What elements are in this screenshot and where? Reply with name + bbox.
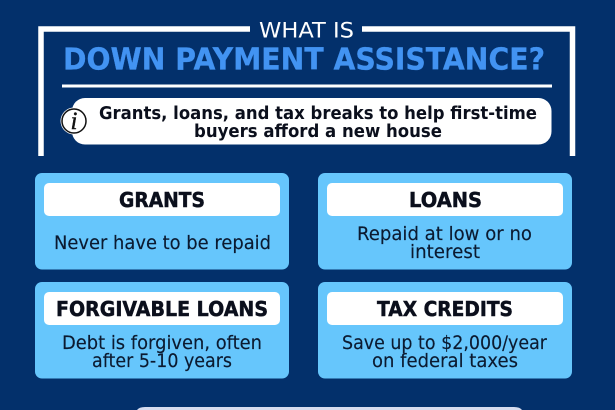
definition callout bbox=[60, 98, 552, 144]
definition text: buyers afford a new house bbox=[194, 121, 442, 142]
title: what is: WHAT IS bbox=[259, 18, 354, 44]
text: forgivable loans description: Debt is forgiven, often bbox=[62, 332, 262, 354]
heading: loans: LOANS bbox=[409, 188, 482, 212]
text: tax credits description: on federal taxes bbox=[372, 350, 518, 372]
text: tax credits description bbox=[342, 332, 547, 372]
text: loans description bbox=[357, 223, 532, 263]
heading: forgivable loans: FORGIVABLE LOANS bbox=[56, 297, 268, 321]
panel: tax credits bbox=[318, 282, 572, 378]
heading: tax credits: TAX CREDITS bbox=[377, 297, 513, 321]
text: grants description: Never have to be repaid bbox=[54, 232, 271, 254]
title divider bbox=[62, 84, 552, 88]
icon: information bbox=[60, 108, 88, 135]
heading: grants: GRANTS bbox=[119, 188, 205, 212]
text: forgivable loans description bbox=[62, 332, 262, 372]
definition text bbox=[99, 103, 537, 142]
title: down payment assistance: DOWN PAYMENT ASSISTANCE? bbox=[63, 42, 545, 78]
icon: information: i bbox=[71, 108, 78, 135]
panel: loans bbox=[318, 173, 572, 270]
panel: bottom panel edge bbox=[137, 407, 522, 410]
text: forgivable loans description: after 5-10 years bbox=[92, 350, 232, 372]
header frame bbox=[41, 29, 572, 156]
text: loans description: Repaid at low or no bbox=[357, 223, 532, 245]
definition text: Grants, loans, and tax breaks to help first-time bbox=[99, 103, 537, 124]
panel: forgivable loans bbox=[35, 282, 289, 378]
text: tax credits description: Save up to $2,000/year bbox=[342, 332, 547, 354]
text: loans description: interest bbox=[410, 241, 480, 263]
panel: grants bbox=[35, 173, 289, 270]
